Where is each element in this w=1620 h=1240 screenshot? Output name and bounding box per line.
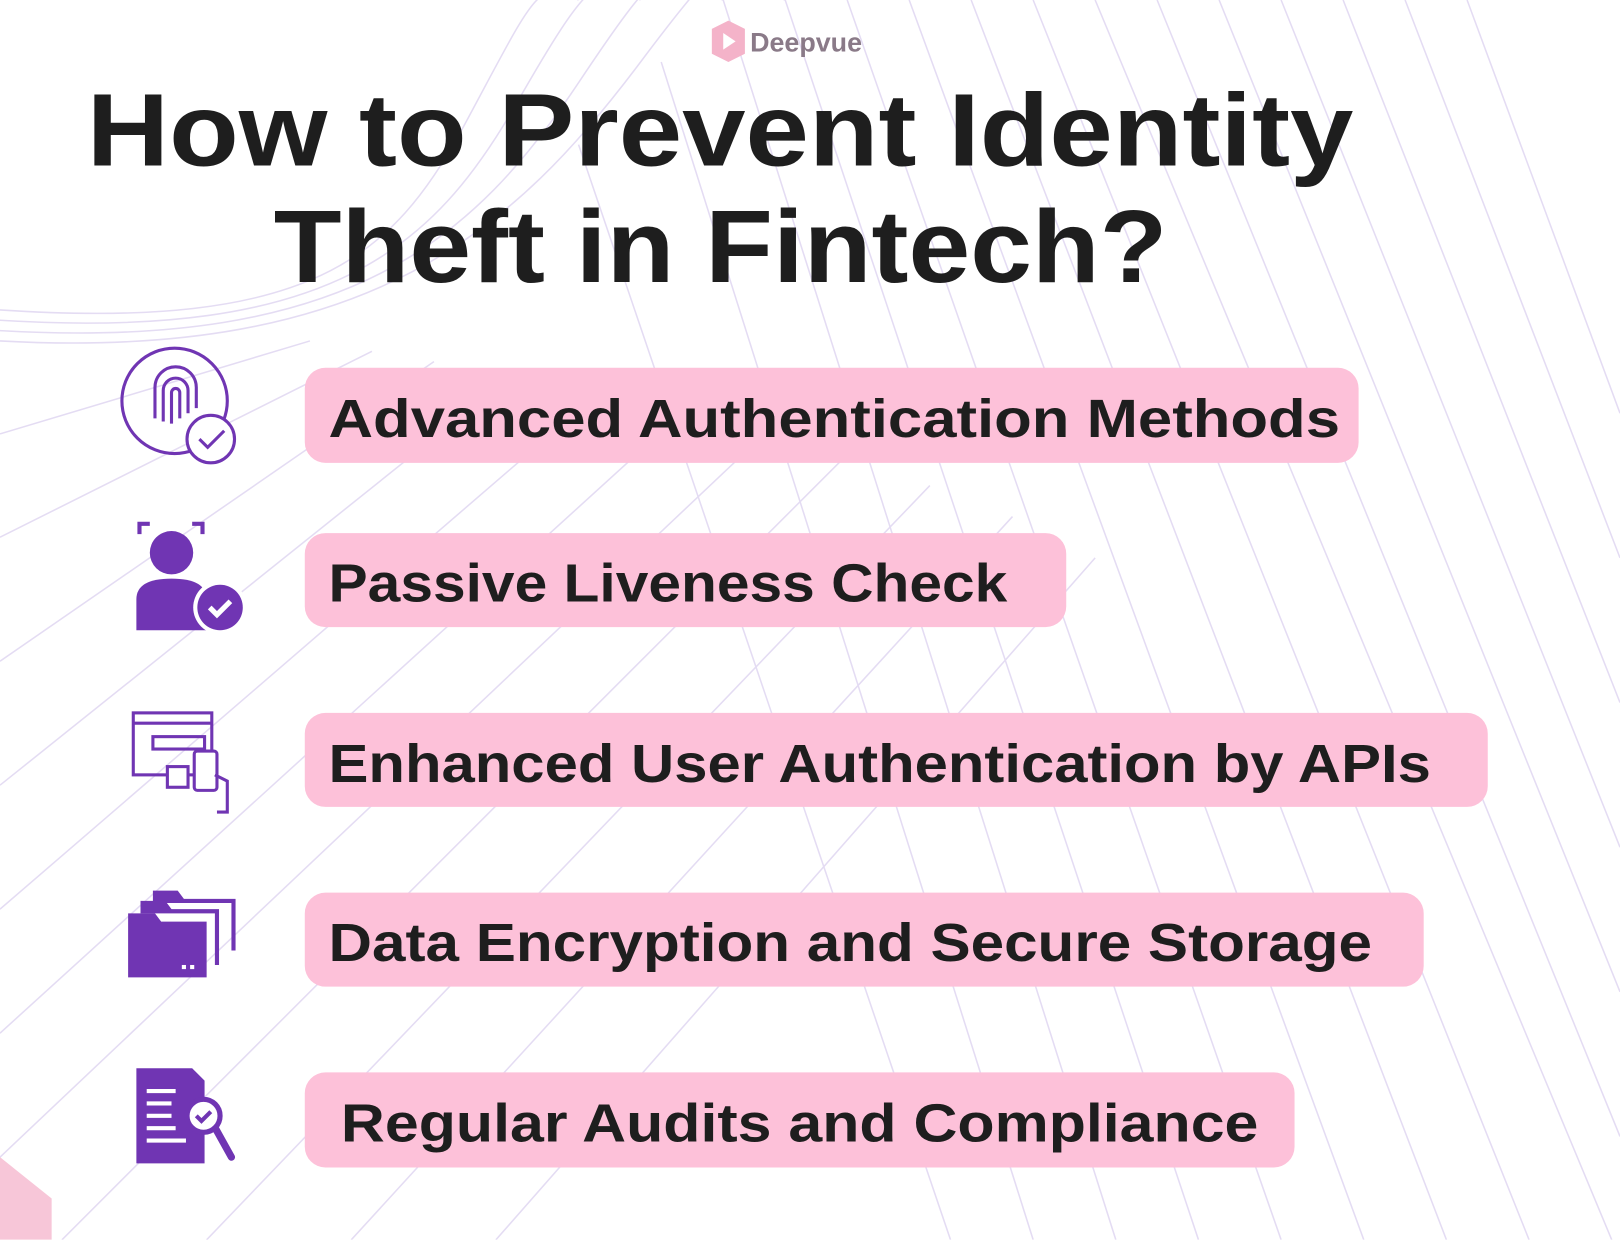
title [87,71,1353,304]
item 1: Advanced Authentication Methods [305,368,1359,463]
title: Theft in Fintech? [274,188,1167,304]
item 5: Regular Audits and Compliance: Regular Audits and Compliance [341,1094,1258,1154]
item 4: Data Encryption and Secure Storage: Data Encryption and Secure Storage [329,913,1372,973]
item 3: Enhanced User Authentication by APIs: Enhanced User Authentication by APIs [329,734,1431,794]
item 2: Passive Liveness Check: Passive Liveness Check [329,553,1007,613]
item 1: Advanced Authentication Methods: Advanced Authentication Methods [329,389,1340,449]
decoration: pink corner [0,1157,52,1240]
logo [712,21,862,62]
item 2: Passive Liveness Check [305,533,1066,627]
icon: face scan [136,522,247,634]
icon: secure app [133,713,227,812]
icon: audit document [136,1068,231,1163]
icon: folders [128,891,236,977]
item 5: Regular Audits and Compliance [305,1072,1295,1167]
icon: fingerprint [122,348,235,463]
item 3: Enhanced User Authentication by APIs [305,713,1488,807]
title: How to Prevent Identity [87,71,1353,187]
item 4: Data Encryption and Secure Storage [305,893,1424,987]
logo: Deepvue [750,28,862,58]
